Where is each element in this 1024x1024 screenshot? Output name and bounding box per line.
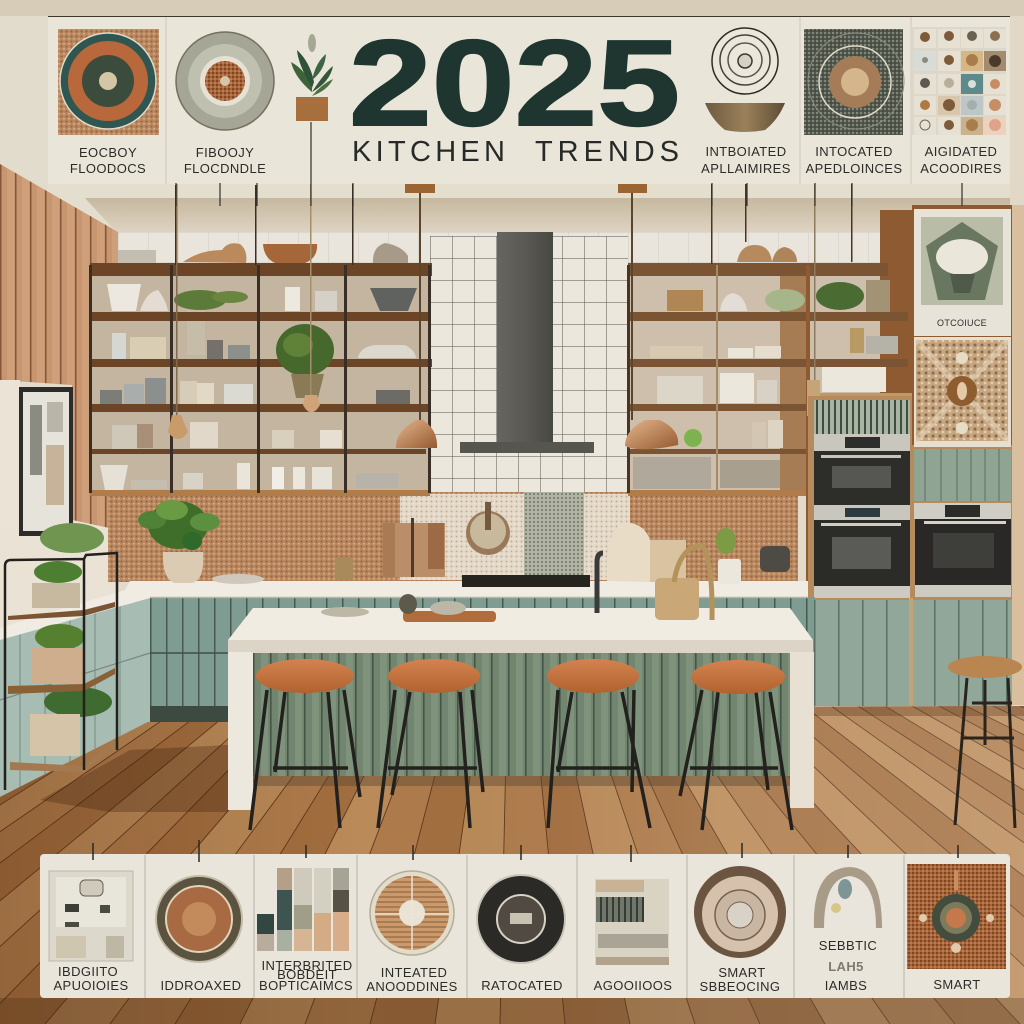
label: card five <box>920 144 1002 176</box>
label: panel nine: SMART <box>933 977 981 992</box>
icon: green patterned tile <box>804 29 904 135</box>
label: panel two: IDDROAXED <box>161 978 241 993</box>
label: panel eight <box>819 938 877 993</box>
sage panel <box>914 449 1011 501</box>
bottom trend strip <box>40 840 1010 998</box>
chart: colour swatches <box>257 868 349 951</box>
range hood <box>460 232 594 453</box>
label: panel one: IBDGIITO <box>58 964 118 979</box>
middle plant <box>32 624 85 684</box>
icon: vented appliance <box>595 879 669 965</box>
back counter <box>0 581 808 640</box>
island decor <box>321 546 712 622</box>
stool 3 <box>547 659 650 828</box>
label: panel four <box>366 965 458 994</box>
hanging plant <box>276 324 334 398</box>
right shelf items <box>633 245 898 489</box>
framed picture <box>19 387 73 536</box>
icon: potted plant <box>291 34 333 121</box>
label: panel three <box>259 958 353 993</box>
label: card one <box>70 145 146 176</box>
poster one: OTCOIUCE <box>937 318 987 328</box>
subtitle: TRENDS <box>535 136 679 168</box>
icon: floor plan sheet <box>49 871 133 961</box>
label: card one: EOCBOY <box>79 145 137 160</box>
shelf boards <box>90 263 432 496</box>
row three items <box>100 378 410 404</box>
label: panel five: RATOCATED <box>481 978 563 993</box>
label: card three: INTBOIATED <box>705 144 787 159</box>
right shelf uprights <box>627 182 852 595</box>
items on back counter <box>138 500 790 587</box>
icon: black induction ring <box>477 875 565 963</box>
right oven tower and artwork <box>808 205 1012 602</box>
row two items <box>112 333 416 359</box>
row four items <box>112 422 342 449</box>
row one items <box>107 284 417 355</box>
label: panel eight: SEBBTIC <box>819 938 877 953</box>
label: card four: INTOCATED <box>815 144 893 159</box>
label: panel three: BOPTICAIMCS <box>259 978 353 993</box>
items on top of shelf <box>118 243 408 263</box>
hanging utensils <box>383 518 445 577</box>
kitchen island <box>228 546 814 810</box>
top banner <box>48 15 1010 206</box>
top plant <box>32 523 104 608</box>
open shelves right <box>627 182 913 595</box>
label: panel seven: SBBEOCING <box>700 979 780 994</box>
title: 2025 <box>349 15 680 151</box>
label: panel one: APUOIOIES <box>53 978 129 993</box>
bar stools <box>250 656 1022 830</box>
icon: lamp <box>814 867 882 928</box>
cooktop <box>462 575 590 587</box>
foreground left shelf with plants <box>5 523 117 790</box>
label: panel three: INTERBRITED <box>261 958 353 973</box>
label: card four <box>806 144 902 176</box>
label: panel four: INTEATED <box>381 965 447 980</box>
lower plant <box>30 687 112 756</box>
pendant lights <box>168 122 820 449</box>
wood floor <box>0 706 1024 1024</box>
stool 1 <box>250 659 360 830</box>
label: panel seven: SMART <box>718 965 766 980</box>
label: panel six: AGOOIIOOS <box>594 978 672 993</box>
label: panel eight: LAH5 <box>828 959 864 974</box>
label: panel three: BOBDEIT <box>277 967 337 982</box>
green patterned tile <box>524 492 584 575</box>
stool 4 <box>680 660 792 830</box>
island top <box>228 608 813 640</box>
poster two <box>914 337 1011 447</box>
label: card two <box>184 145 266 176</box>
back cabinets <box>0 597 1012 800</box>
label: card three: APLLAIMIRES <box>701 161 791 176</box>
icon: copper coil <box>370 871 454 955</box>
left wall wood panel <box>0 164 118 640</box>
label: panel eight: IAMBS <box>825 978 867 993</box>
label: card four: APEDLOINCES <box>806 161 902 176</box>
hanging rods <box>176 122 962 206</box>
oven one <box>814 434 910 505</box>
stool 2 <box>378 659 483 828</box>
potted plant <box>138 500 220 583</box>
label: card two: FLOCDNDLE <box>184 161 266 176</box>
cutting boards <box>607 522 686 582</box>
small plant <box>716 528 741 584</box>
subtitle <box>352 136 679 168</box>
oven three <box>914 503 1011 597</box>
right shelf boards <box>628 263 912 496</box>
icon: concentric plate and bowl <box>705 28 785 132</box>
icon: terracotta dial <box>156 876 242 962</box>
island legs <box>228 652 253 810</box>
label: card three <box>701 144 791 176</box>
island front slats <box>252 640 792 776</box>
oven two <box>814 505 910 598</box>
label: panel four: ANOODDINES <box>366 979 458 994</box>
tile wall <box>118 232 883 494</box>
icon: tile sample grid <box>912 27 1006 135</box>
open shelves left <box>89 180 432 496</box>
pendant caps <box>405 184 647 193</box>
icon: terracotta mosaic <box>907 864 1006 969</box>
label: card five: AIGIDATED <box>925 144 997 159</box>
poster one <box>914 209 1011 336</box>
label: panel seven <box>700 965 780 994</box>
icon: clay dish <box>694 866 786 958</box>
icon: sage plate <box>176 32 274 130</box>
icon: woven round rug <box>58 29 159 135</box>
wall pan <box>466 502 510 555</box>
stool 5 <box>948 656 1022 828</box>
label: card one: FLOODOCS <box>70 161 146 176</box>
shelf uprights <box>89 180 431 493</box>
label: card two: FIBOOJY <box>196 145 254 160</box>
label: panel one <box>53 964 129 993</box>
subtitle: KITCHEN <box>352 136 505 168</box>
label: card five: ACOODIRES <box>920 161 1002 176</box>
fluted panel <box>814 400 910 434</box>
terracotta backsplash <box>108 492 798 582</box>
row five items <box>100 463 398 490</box>
